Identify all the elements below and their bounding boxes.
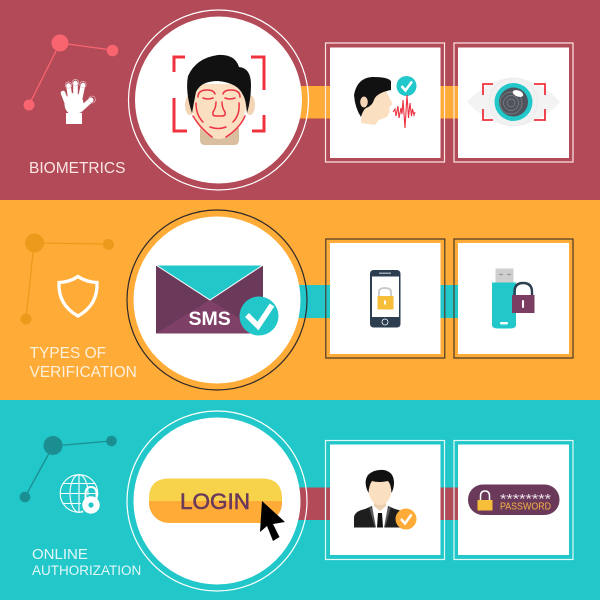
check mark	[247, 305, 272, 326]
password pill	[468, 484, 560, 515]
password label: PASSWORD	[500, 500, 551, 512]
sound wave	[393, 95, 415, 128]
usb light	[500, 322, 508, 324]
speaker	[379, 272, 391, 274]
suit	[354, 506, 406, 528]
screen	[372, 276, 399, 317]
check badge	[396, 508, 416, 530]
head profile	[361, 88, 393, 125]
hair	[187, 55, 251, 113]
lock body	[478, 500, 492, 510]
shackle	[514, 283, 532, 296]
phone	[370, 270, 400, 328]
keyhole	[88, 502, 94, 508]
panel: types of verification	[0, 200, 600, 400]
card: verified user	[326, 440, 444, 560]
card: voice recognition	[326, 43, 444, 162]
connector strip	[296, 488, 460, 520]
neck	[374, 498, 386, 511]
shackle	[480, 491, 490, 501]
SMS label: SMS	[188, 308, 231, 330]
brackets	[483, 84, 545, 120]
padlock shackle	[379, 288, 391, 297]
scan brackets	[174, 57, 264, 131]
button lower	[149, 478, 282, 523]
usb connector	[496, 268, 514, 282]
circle: login button	[127, 411, 307, 591]
button upper	[149, 478, 282, 501]
shackle	[86, 487, 96, 499]
check badge	[396, 76, 416, 96]
face	[193, 84, 245, 139]
thumb	[80, 100, 91, 110]
heading: online authorization	[32, 546, 141, 578]
check badge	[240, 296, 278, 336]
keyhole	[384, 300, 386, 304]
pupil rings	[500, 92, 522, 114]
login label: LOGIN	[180, 489, 250, 514]
ear right	[245, 95, 255, 115]
network node graphic	[20, 234, 114, 324]
icon: shield	[59, 276, 97, 316]
icon: hand with fingerprints	[63, 79, 96, 124]
card: USB lock	[454, 239, 573, 358]
heading: online authorization: AUTHORIZATION	[32, 563, 141, 578]
heading: types of verification: TYPES OF	[30, 345, 106, 362]
lock	[82, 496, 100, 514]
heading: types of verification: VERIFICATION	[30, 364, 137, 381]
ears	[185, 95, 195, 115]
connector strip	[296, 285, 460, 318]
network node graphic	[24, 34, 118, 110]
home button	[382, 319, 388, 325]
heading: types of verification	[30, 345, 137, 381]
connector strip	[296, 86, 460, 118]
hair	[366, 470, 394, 493]
lapels	[369, 507, 391, 528]
ear	[360, 96, 368, 108]
card: smartphone lock	[326, 239, 445, 358]
panel: biometrics	[0, 0, 600, 200]
envelope flap	[156, 265, 263, 300]
face	[368, 475, 392, 505]
eye shape	[467, 78, 560, 126]
shirt	[372, 506, 388, 528]
cursor	[260, 501, 285, 541]
network node graphic	[20, 436, 117, 502]
pupil	[499, 88, 528, 116]
panel: online authorization	[0, 400, 600, 600]
asterisks: ********	[500, 490, 552, 506]
lock body	[512, 295, 534, 313]
heading: biometrics: BIOMETRICS	[29, 160, 125, 177]
heading: online authorization: ONLINE	[32, 546, 88, 563]
circle: face recognition	[128, 10, 308, 190]
connector slots	[499, 274, 511, 276]
check mark	[402, 82, 412, 90]
teal ring	[494, 83, 532, 121]
envelope lower fold	[156, 300, 263, 334]
highlight	[512, 89, 524, 98]
neck	[200, 128, 239, 145]
padlock body	[378, 296, 394, 310]
check mark	[401, 514, 412, 524]
fingertip scan rings	[65, 79, 96, 103]
circle: SMS verification	[127, 210, 307, 390]
card: iris scan	[454, 43, 573, 162]
facial mapping lines	[193, 90, 245, 137]
icon: globe with lock	[60, 475, 100, 514]
card: password	[454, 440, 573, 560]
envelope body	[156, 265, 263, 334]
usb body	[492, 282, 516, 328]
tie	[377, 513, 383, 528]
keyhole	[522, 301, 524, 307]
hair	[354, 77, 391, 117]
iris	[490, 78, 538, 126]
